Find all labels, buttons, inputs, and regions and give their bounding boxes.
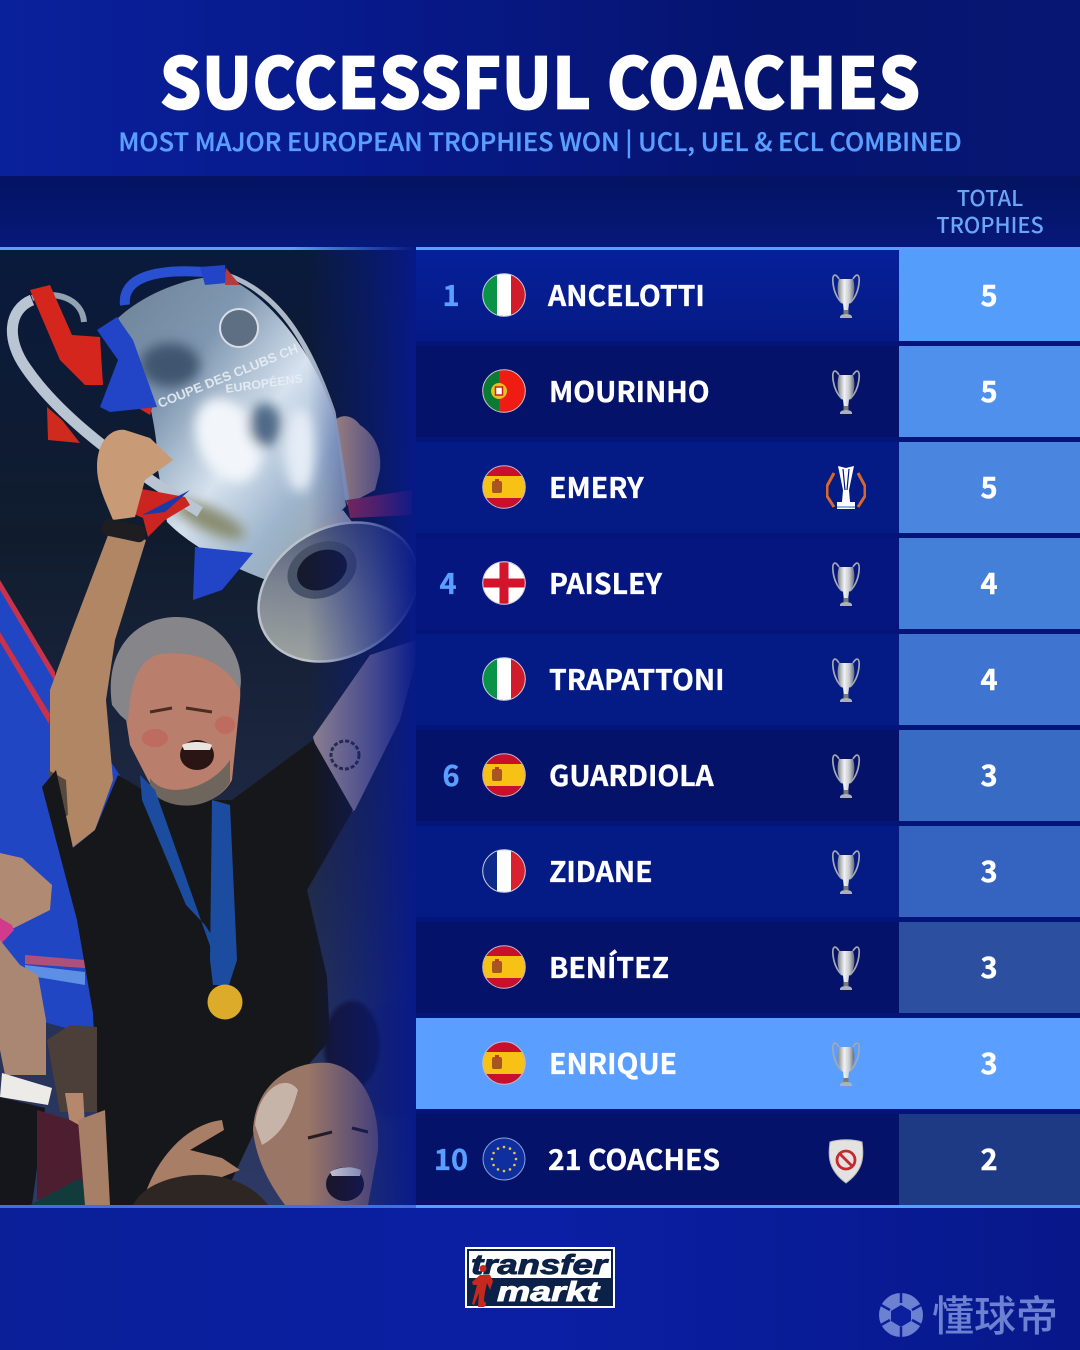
value: 5 (899, 250, 1080, 341)
value: 4: 4 (980, 561, 998, 603)
column heading: total trophies: TROPHIES (936, 209, 1044, 240)
title: SUCCESSFUL COACHES (160, 27, 920, 131)
line below photo (0, 1205, 416, 1208)
value: 5: 5 (980, 465, 998, 507)
table top line (416, 247, 1080, 250)
icon: Champions League trophy (832, 850, 860, 894)
value: 4 (899, 538, 1080, 629)
row: 21 coaches (416, 1114, 1080, 1205)
name: BENÍTEZ (549, 946, 669, 987)
logo: transfermarkt (465, 1247, 615, 1308)
row: Ancelotti (416, 250, 1080, 341)
subtitle: MOST MAJOR EUROPEAN TROPHIES WON | UCL, UEL & ECL COMBINED (118, 123, 962, 159)
rank: 1: 1 (442, 273, 460, 315)
icon: Europa League trophy (826, 466, 866, 509)
value: 3: 3 (980, 1041, 998, 1083)
trophy bowl (118, 277, 346, 582)
flag: Italy (482, 273, 526, 317)
gold medal (208, 984, 242, 1020)
watermark text: 懂球帝 (932, 1283, 1058, 1344)
watermark icon (879, 1293, 923, 1337)
value: 2: 2 (980, 1137, 998, 1179)
value: 3: 3 (980, 849, 998, 891)
value: 4: 4 (980, 657, 998, 699)
logo: transfermarkt: markt (497, 1276, 601, 1307)
crowd at bottom right (324, 1000, 430, 1120)
row: Guardiola (416, 730, 1080, 821)
icon: prohibited shield (828, 1139, 864, 1184)
background: top band (0, 0, 1080, 176)
ribbons (30, 265, 412, 600)
value: 3 (899, 826, 1080, 917)
flag: England (482, 561, 526, 605)
value: 5: 5 (980, 273, 998, 315)
name: TRAPATTONI (549, 658, 725, 699)
background: bottom band (0, 1208, 1080, 1350)
tattoo on arm (331, 741, 359, 769)
value: 5: 5 (980, 369, 998, 411)
icon: Champions League trophy (832, 1042, 860, 1086)
flag: France (482, 849, 526, 893)
name: ZIDANE (549, 850, 653, 891)
icon: Champions League trophy (832, 946, 860, 990)
logo: transfermarkt: transfer (471, 1249, 610, 1280)
icon: Champions League trophy (832, 370, 860, 414)
row: Emery (416, 442, 1080, 533)
row: Enrique highlighted (416, 1018, 1080, 1109)
trophy engraving: COUPE DES CLUBS CH (156, 341, 300, 411)
line above photo (0, 247, 416, 250)
column heading: total trophies (936, 182, 1044, 240)
trophy left handle (12, 300, 200, 512)
value: 5 (899, 442, 1080, 533)
photo: coach lifting trophy (0, 250, 416, 1205)
trophy foot and base (233, 495, 443, 689)
icon: Champions League trophy (832, 274, 860, 318)
name: PAISLEY (549, 562, 662, 603)
bald man in crowd (253, 1063, 378, 1205)
rank: 10: 10 (434, 1137, 468, 1179)
icon: Champions League trophy (832, 658, 860, 702)
right arm (313, 640, 416, 822)
coach head (111, 617, 241, 806)
table background (416, 247, 1080, 1208)
flag: Europe (482, 1138, 526, 1180)
flag: Spain (482, 753, 526, 797)
medal lanyard (140, 775, 237, 985)
flag: Spain (482, 1041, 526, 1085)
table bottom line (416, 1205, 1080, 1208)
row: Mourinho (416, 346, 1080, 437)
row: Benitez (416, 922, 1080, 1013)
hair in foreground (133, 1175, 268, 1205)
right hand behind trophy (335, 416, 380, 505)
value: 3: 3 (980, 753, 998, 795)
rank: 6: 6 (442, 753, 460, 795)
trophy engraving: EUROPÉENS (224, 370, 304, 396)
background: header band (0, 176, 1080, 248)
flag: Italy (482, 657, 526, 701)
row: Zidane (416, 826, 1080, 917)
stage blue panel (0, 580, 150, 1040)
trophy right handle (217, 272, 347, 500)
value: 3 (899, 730, 1080, 821)
flag: Spain (482, 465, 526, 509)
value: 3 (899, 922, 1080, 1013)
value: 2 (899, 1114, 1080, 1205)
rank: 4: 4 (439, 561, 457, 603)
value: 5 (899, 346, 1080, 437)
icon: Champions League trophy (832, 562, 860, 606)
column heading: total trophies: TOTAL (957, 182, 1023, 213)
value: 4 (899, 634, 1080, 725)
value: 3: 3 (980, 945, 998, 987)
name: 21 COACHES (548, 1138, 720, 1179)
raised left arm and hand (48, 430, 173, 848)
icon: Champions League trophy (832, 754, 860, 798)
name: ENRIQUE (549, 1042, 677, 1083)
row: Trapattoni (416, 634, 1080, 725)
crowd at bottom left (0, 853, 110, 1205)
row: Paisley (439, 538, 1080, 629)
name: MOURINHO (549, 370, 710, 411)
flag: Portugal (482, 369, 526, 413)
trophy logo circle (220, 309, 258, 347)
name: GUARDIOLA (549, 754, 714, 795)
flag: Spain (482, 945, 526, 989)
black t-shirt (42, 740, 353, 1205)
supporting hand (143, 1120, 240, 1205)
name: EMERY (549, 466, 644, 507)
name: ANCELOTTI (548, 274, 705, 315)
